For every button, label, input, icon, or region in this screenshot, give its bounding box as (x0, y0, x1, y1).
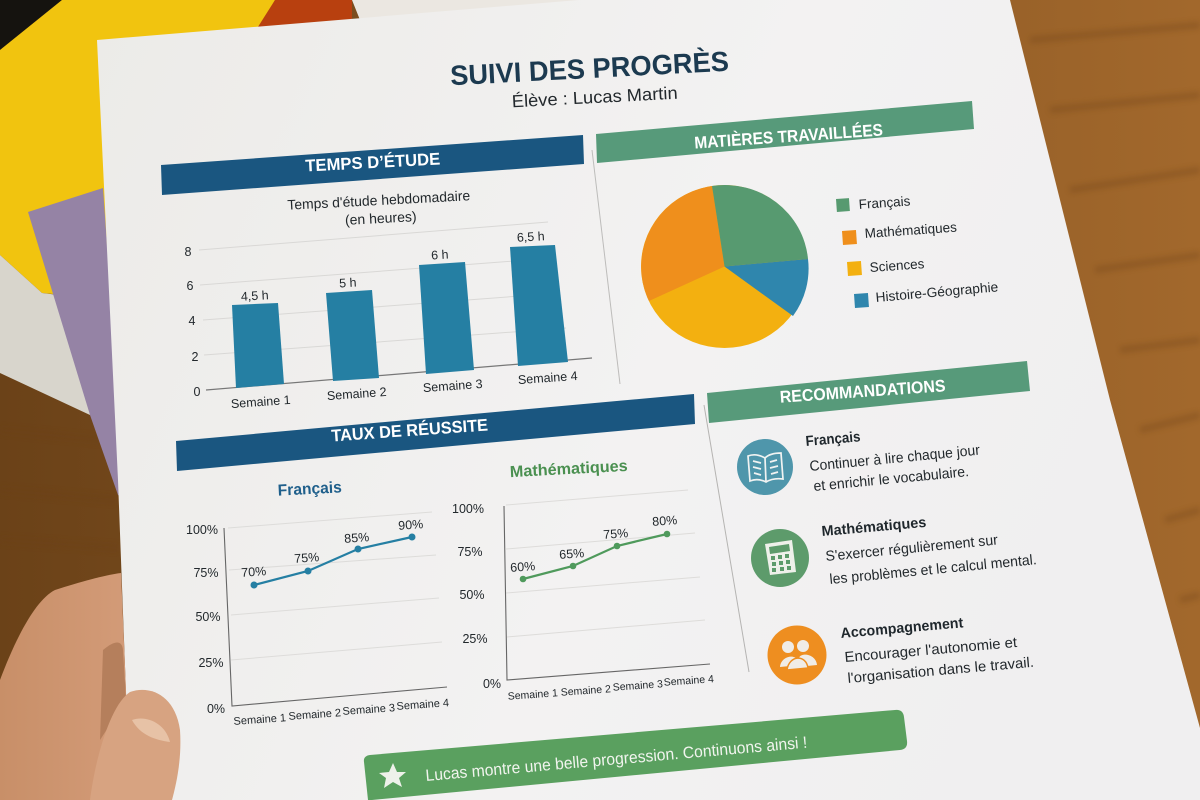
recommendation: français (805, 429, 981, 495)
heading bar: temps d'étude (161, 135, 584, 195)
recommendation: accompagnement: l'organisation dans le travail. (847, 655, 1035, 687)
recommendation: accompagnement: Encourager l'autonomie et (844, 635, 1018, 666)
bar chart: 6 (187, 279, 194, 293)
legend: Histoire-Géographie (875, 279, 999, 305)
line chart: mathématiques: 100% (452, 502, 484, 516)
recommendation: français: et enrichir le vocabulaire. (813, 464, 970, 495)
icon: book (737, 439, 793, 495)
line chart: français (186, 479, 449, 728)
recommendation: accompagnement: Accompagnement (840, 615, 964, 642)
line chart: français: Semaine 2 (288, 707, 341, 723)
heading bar: taux de réussite: TAUX DE RÉUSSITE (331, 416, 489, 445)
heading bar: matières (596, 101, 974, 163)
heading bar: recommandations: RECOMMANDATIONS (779, 376, 946, 407)
line chart: français: 0% (207, 702, 225, 716)
bar chart: Semaine 4 (517, 369, 578, 387)
line chart: mathématiques: Semaine 3 (612, 678, 663, 694)
legend: Français (858, 193, 911, 212)
bar chart: 6 h (431, 248, 449, 262)
line chart: français: 50% (195, 610, 221, 624)
line chart: mathématiques: 75% (603, 526, 629, 542)
line chart: mathématiques: 75% (457, 545, 483, 559)
bar chart: 0 (194, 385, 201, 399)
panel: matières travaillées (596, 101, 999, 348)
panel: temps d'étude (161, 135, 592, 411)
icon: calculator (751, 529, 809, 587)
line chart: français: Semaine 4 (396, 697, 449, 713)
line chart: français: 100% (186, 523, 218, 537)
recommendation: mathématiques: Mathématiques (821, 515, 927, 540)
recommendation: français: Continuer à lire chaque jour (809, 443, 981, 475)
line chart: mathématiques: 60% (510, 559, 536, 575)
line chart: français: Semaine 1 (233, 712, 286, 728)
line chart: français: 85% (344, 530, 370, 546)
panel: taux de réussite (176, 394, 714, 728)
subtitle: Élève : Lucas Martin (511, 83, 678, 111)
line chart: mathématiques: Mathématiques (509, 458, 628, 481)
line chart: mathématiques: 25% (462, 632, 488, 646)
line chart: mathématiques (452, 458, 714, 703)
heading bar: recommandations (707, 361, 1030, 423)
bar chart: Semaine 1 (230, 393, 291, 411)
legend: Sciences (869, 256, 925, 275)
line chart: mathématiques: 0% (483, 677, 501, 691)
bar chart: 2 (192, 350, 199, 364)
recommendation: accompagnement (840, 615, 1035, 687)
recommendation: mathématiques (821, 515, 1037, 588)
hand holding the sheet (0, 573, 180, 800)
line chart: mathématiques: Semaine 2 (560, 683, 611, 699)
callout banner (364, 710, 907, 800)
title: SUIVI DES PROGRÈS (449, 46, 730, 91)
panel: recommandations (707, 361, 1037, 687)
bar chart (185, 222, 592, 411)
icon: people (768, 626, 826, 684)
pie chart (641, 185, 809, 348)
line chart: mathématiques: Semaine 1 (507, 687, 558, 703)
line chart: mathématiques: Semaine 4 (663, 673, 714, 689)
line chart: mathématiques: 65% (559, 546, 585, 562)
line chart: français: 75% (193, 566, 219, 580)
bar chart: 4 (189, 314, 196, 328)
line chart: mathématiques: 80% (652, 513, 678, 529)
bar chart: Semaine 3 (422, 377, 483, 395)
background: stacked notebooks (0, 0, 600, 500)
line chart: français: Semaine 3 (342, 702, 395, 718)
line chart: français: 90% (398, 517, 424, 533)
bar chart: 4,5 h (241, 288, 269, 304)
heading bar: temps d'étude: TEMPS D’ÉTUDE (305, 149, 441, 176)
line chart: français: 75% (294, 550, 320, 566)
chart title: (en heures) (345, 208, 417, 228)
icon: star (379, 763, 406, 788)
line chart: français: 70% (241, 564, 267, 580)
line chart: français: 25% (198, 656, 224, 670)
chart title: Temps d'étude hebdomadaire (287, 187, 471, 213)
recommendation: mathématiques: les problèmes et le calcul mental. (829, 552, 1037, 588)
recommendation: mathématiques: S'exercer régulièrement sur (825, 532, 999, 565)
legend: Mathématiques (864, 220, 958, 241)
recommendation: français: Français (805, 429, 861, 450)
heading bar: matières: MATIÈRES TRAVAILLÉES (694, 120, 884, 153)
chart title (287, 187, 471, 228)
line chart: français: Français (277, 479, 342, 500)
bar chart: 8 (185, 245, 192, 259)
line chart: mathématiques: 50% (459, 588, 485, 602)
callout banner: Lucas montre une belle progression. Continuons ainsi ! (425, 734, 808, 785)
bar chart: 6,5 h (517, 229, 545, 245)
heading bar: taux de réussite (176, 394, 695, 471)
bar chart: Semaine 2 (326, 385, 387, 403)
legend (836, 193, 999, 308)
bar chart: 5 h (339, 276, 357, 290)
